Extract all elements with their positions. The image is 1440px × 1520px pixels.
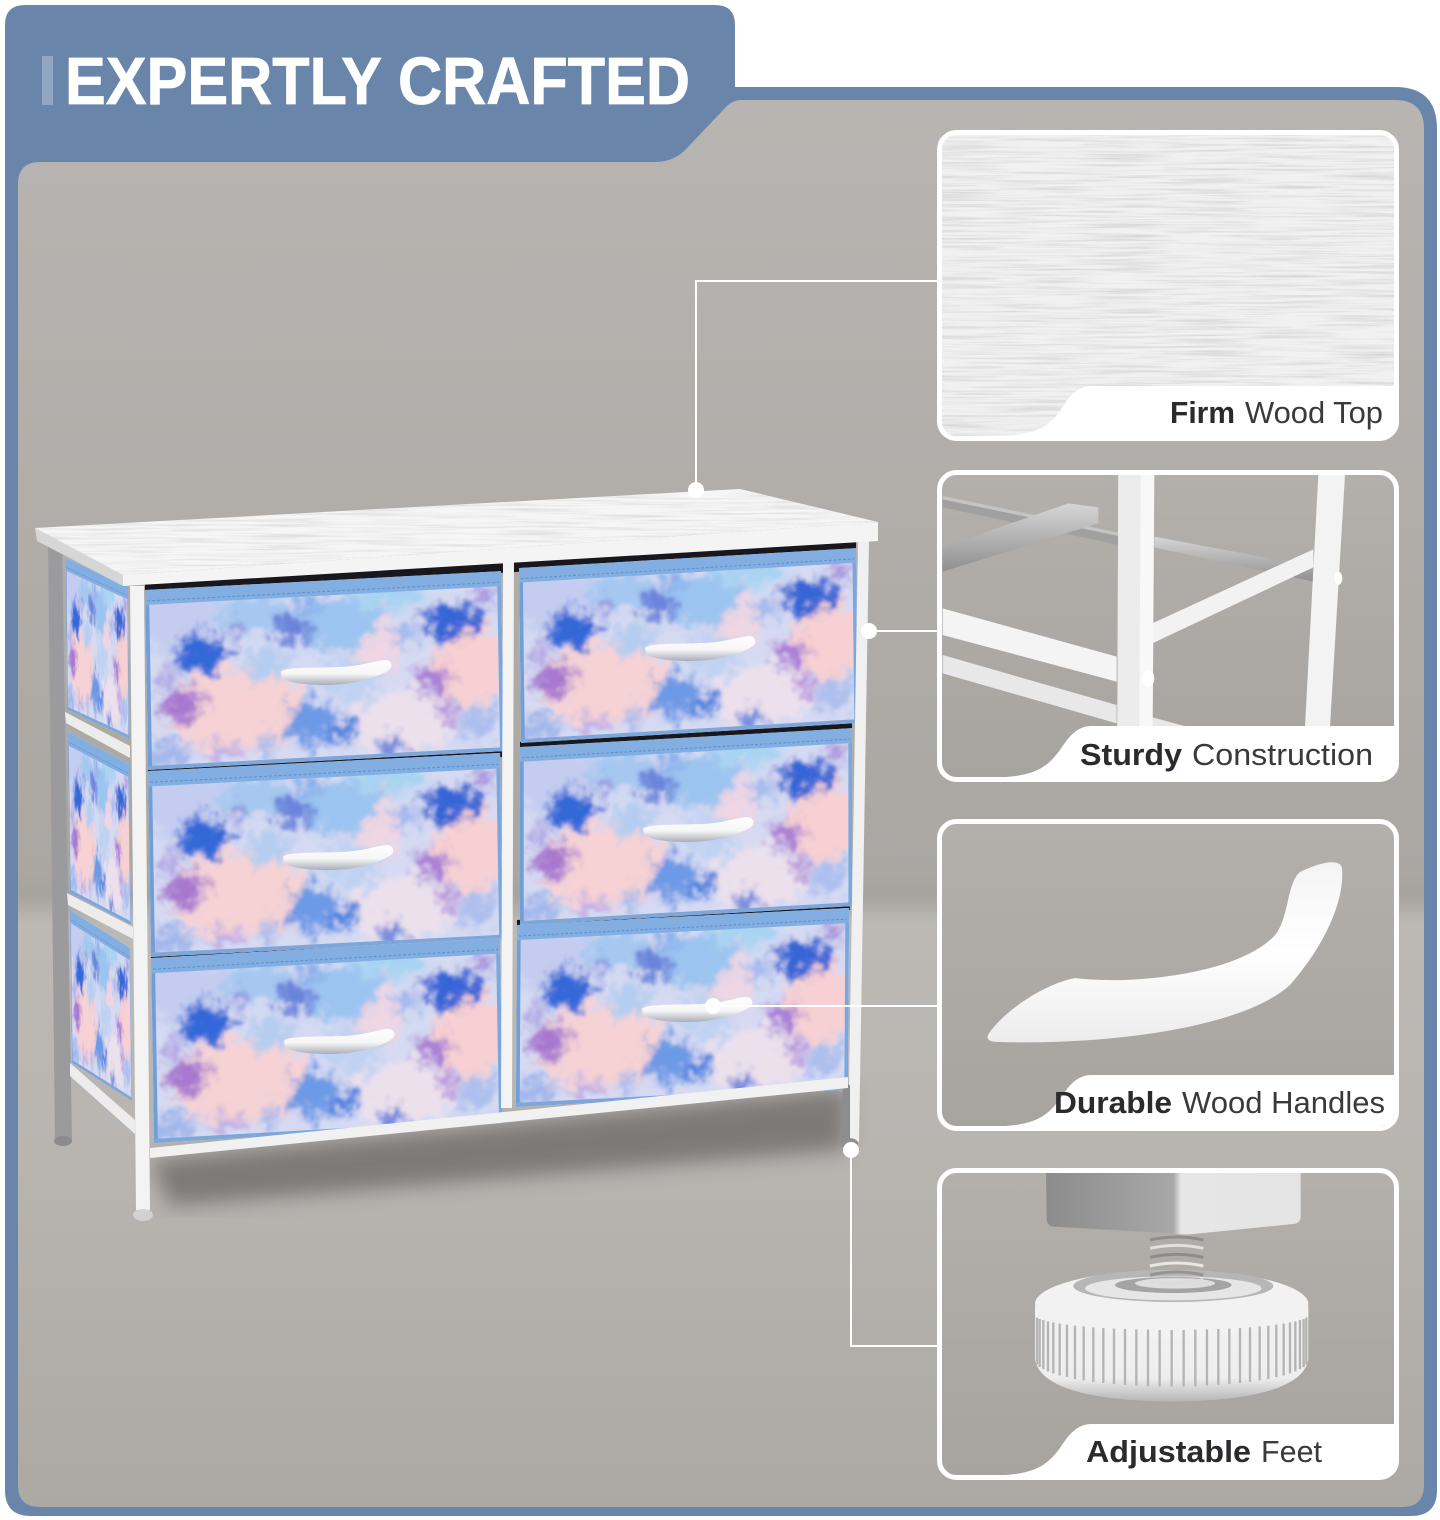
drawer right middle <box>492 697 880 956</box>
frame front posts and bottom rail <box>130 540 869 1221</box>
callout connector: feet <box>843 1142 938 1346</box>
side fabric panel lower <box>65 881 138 1130</box>
panel: adjustable feet <box>940 1170 1396 1478</box>
side fabric panel upper <box>61 530 134 767</box>
drawer left middle <box>118 720 533 989</box>
label: Wood Handles <box>1182 1085 1385 1120</box>
frame close-up <box>942 475 1394 777</box>
wood top <box>30 485 880 586</box>
side rails <box>65 712 135 1134</box>
dresser illustration <box>30 485 887 1221</box>
panel: durable wood handles <box>940 822 1396 1128</box>
drawer right top <box>490 517 887 774</box>
handles <box>281 636 755 1054</box>
label: Feet <box>1261 1434 1322 1469</box>
label: Construction <box>1192 737 1373 772</box>
foot close-up <box>1006 1173 1394 1475</box>
label: Wood Top <box>1245 395 1383 430</box>
label <box>1170 395 1383 430</box>
handle close-up <box>942 824 1394 1126</box>
back left leg <box>48 541 72 1140</box>
label: Firm <box>1170 395 1235 430</box>
callout connector: wood top <box>688 281 938 498</box>
title: EXPERTLY CRAFTED <box>65 44 690 119</box>
label: Adjustable <box>1086 1434 1251 1469</box>
wood texture <box>942 135 1394 436</box>
back left foot <box>54 1136 72 1146</box>
label: Sturdy <box>1080 737 1183 772</box>
panel: sturdy construction <box>940 472 1396 780</box>
label: Durable <box>1054 1085 1172 1120</box>
floor shadow <box>150 1088 848 1206</box>
interior dark gaps <box>145 540 856 960</box>
label <box>1054 1085 1385 1120</box>
drawer left top <box>114 540 535 802</box>
label <box>1086 1434 1322 1469</box>
drawer left bottom <box>121 906 533 1176</box>
drawer right bottom <box>488 876 877 1139</box>
callout connector: frame <box>861 623 938 639</box>
callout connector: handle <box>705 998 938 1014</box>
label <box>1080 737 1373 772</box>
side fabric panel middle <box>63 702 136 954</box>
panel: firm wood top <box>940 132 1396 438</box>
